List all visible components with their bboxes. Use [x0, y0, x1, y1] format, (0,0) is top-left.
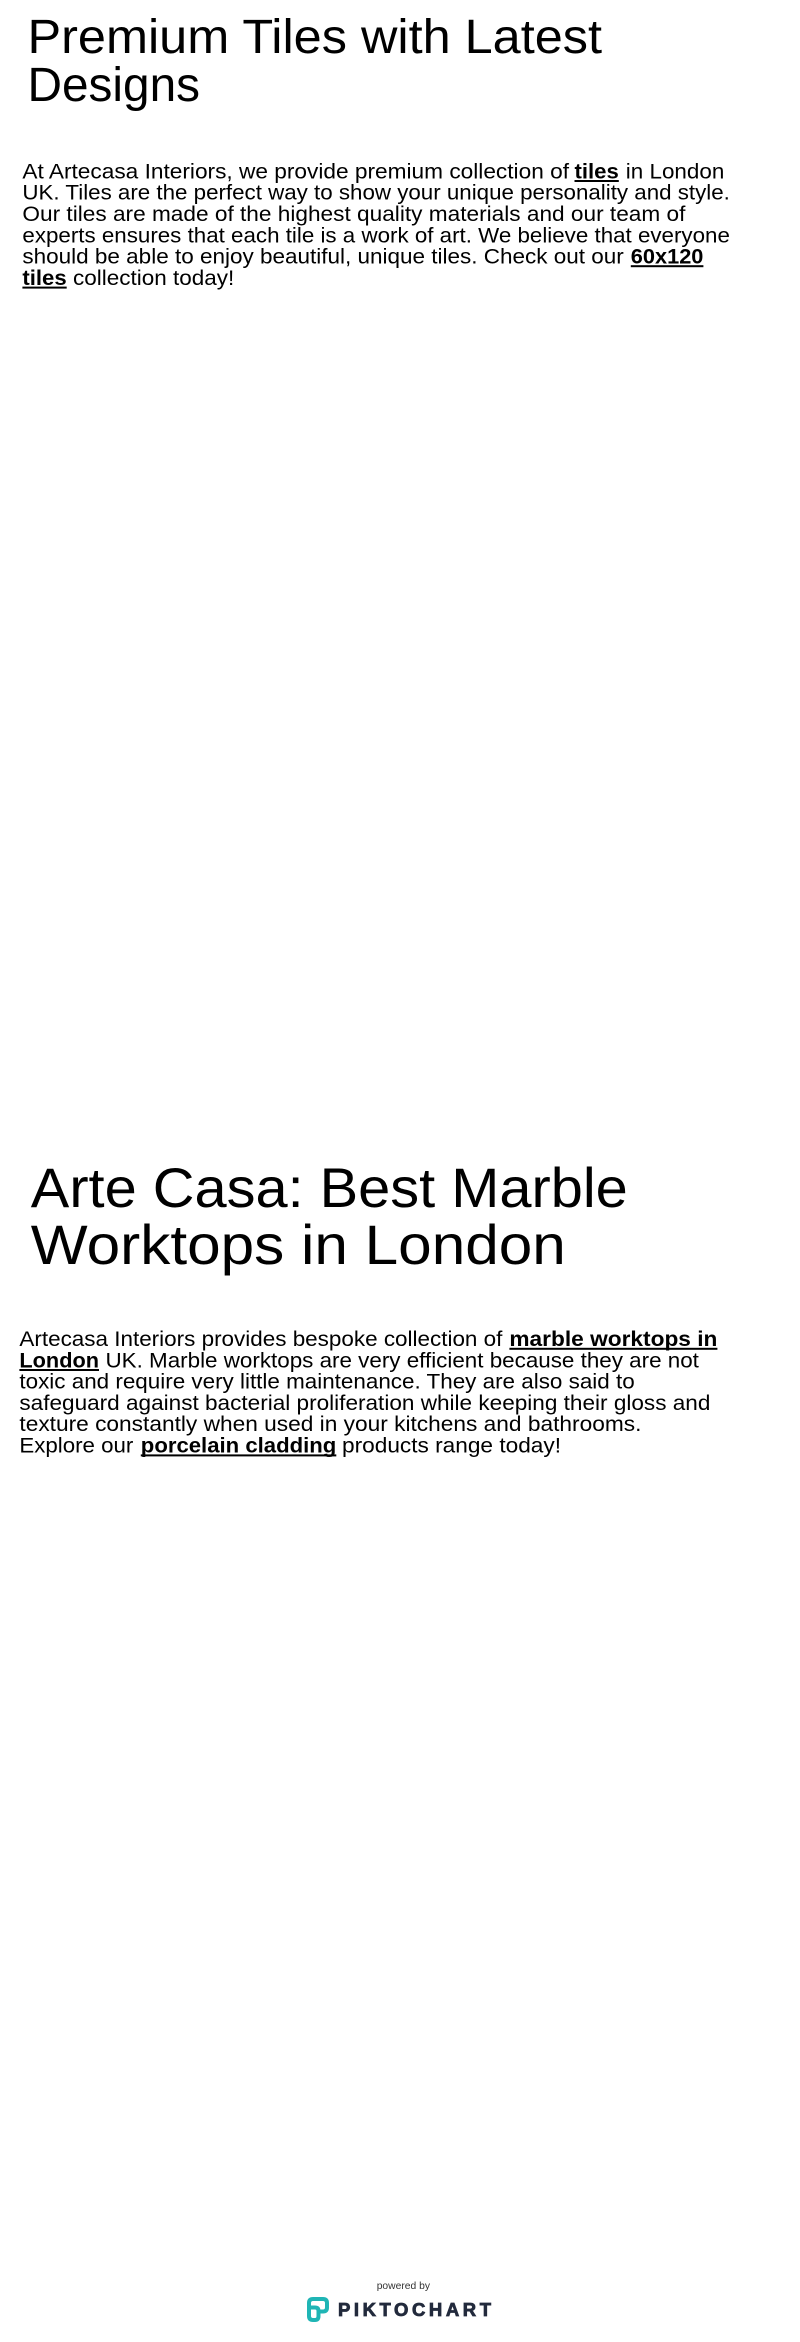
text block: marble worktops intro: texture constantly when used in your kitchens and bathrooms. — [19, 1412, 641, 1436]
title: Arte Casa: Arte Casa: Best Marble — [31, 1156, 628, 1219]
text block: tiles intro: experts ensures that each tile is a work of art. We believe that everyone — [22, 223, 730, 247]
text block: tiles intro: tiles — [22, 266, 67, 290]
text block: tiles intro — [22, 159, 730, 290]
title: Premium Tiles: Premium Tiles with Latest — [28, 11, 602, 64]
icon: Piktochart logo — [309, 2299, 327, 2320]
text block: marble worktops intro — [19, 1327, 717, 1458]
text block: tiles intro: collection today! — [73, 266, 234, 290]
text block: marble worktops intro: Explore our — [19, 1434, 133, 1458]
text block: tiles intro: Our tiles are made of the highest quality materials and our team of — [22, 202, 685, 226]
text block: marble worktops intro: toxic and require very little maintenance. They are also said to — [19, 1370, 635, 1394]
text block: tiles intro: UK. Tiles are the perfect way to show your unique personality and style. — [22, 181, 730, 205]
Piktochart wordmark: PIKTOCHART — [338, 2299, 492, 2320]
text block: marble worktops intro: London — [19, 1348, 99, 1372]
text block: tiles intro: should be able to enjoy beautiful, unique tiles. Check out our — [22, 244, 624, 268]
text block: marble worktops intro: safeguard against bacterial proliferation while keeping their gloss and — [19, 1391, 710, 1415]
text block: marble worktops intro: marble worktops in — [509, 1327, 717, 1351]
text block: marble worktops intro: products range today! — [342, 1434, 561, 1458]
text block: tiles intro: tiles — [574, 159, 619, 183]
text block: tiles intro: 60x120 — [631, 244, 703, 268]
title: Arte Casa: Worktops in London — [31, 1213, 566, 1276]
title: Premium Tiles: Designs — [28, 59, 200, 112]
text block: marble worktops intro: Artecasa Interiors provides bespoke collection of — [19, 1327, 502, 1351]
title: Premium Tiles — [28, 11, 602, 112]
text block: tiles intro: At Artecasa Interiors, we provide premium collection of — [22, 159, 569, 183]
text block: marble worktops intro: porcelain cladding — [141, 1434, 336, 1458]
powered by label: powered by — [377, 2280, 431, 2292]
text block: marble worktops intro: UK. Marble worktops are very efficient because they are not — [106, 1348, 699, 1372]
text block: tiles intro: in London — [626, 159, 724, 183]
title: Arte Casa — [31, 1156, 628, 1276]
footer: powered by Piktochart — [309, 2280, 492, 2320]
